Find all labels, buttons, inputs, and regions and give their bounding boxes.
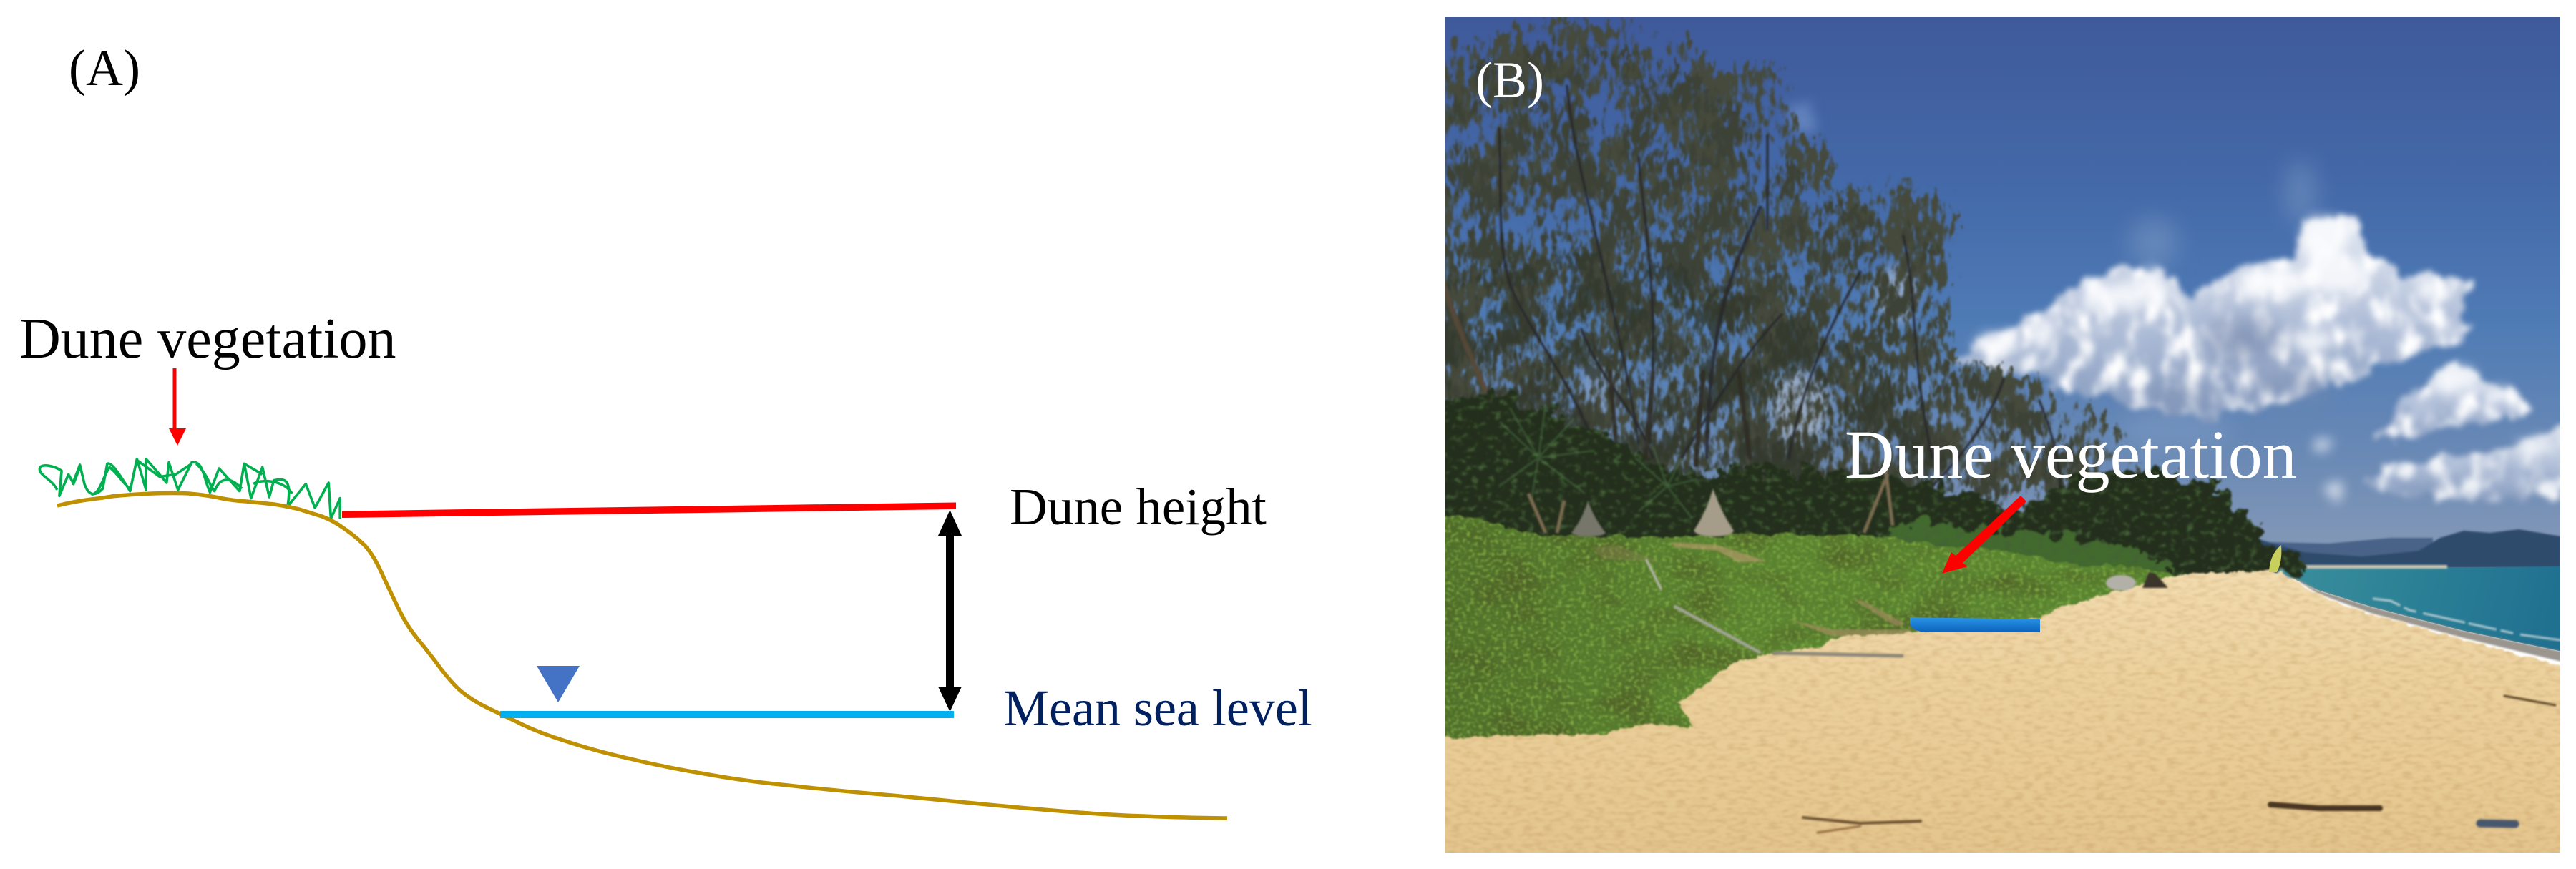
green dune vegetation slope	[1431, 515, 2190, 758]
main cumulus cloud	[1948, 213, 2471, 417]
arrow: dune height	[938, 510, 962, 712]
icon: water level triangle	[537, 666, 580, 702]
bare sand patches on dune	[1592, 542, 1911, 637]
rocks	[2106, 572, 2168, 591]
second cloud	[2374, 363, 2531, 441]
driftwood and debris	[1646, 560, 2555, 833]
label: dune vegetation: Dune vegetation	[19, 308, 396, 370]
clouds	[1581, 102, 2569, 501]
sea	[2272, 565, 2576, 665]
mean sea level line	[500, 711, 954, 718]
bushes behind dune	[1431, 392, 2311, 583]
beach sand	[1424, 571, 2576, 869]
arrow: to dune vegetation on photo	[1942, 496, 2026, 574]
label: dune height: Dune height	[1010, 478, 1267, 536]
faint cloud behind tree tops	[1790, 102, 1816, 134]
pandanus fronds	[1499, 404, 1697, 519]
kayak	[1910, 617, 2040, 632]
panel A: dune profile diagram	[19, 39, 1312, 818]
third cloud	[2362, 428, 2569, 501]
sky	[1431, 0, 2576, 579]
label: mean sea level: Mean sea level	[1003, 679, 1312, 737]
cloud highlights	[1975, 218, 2447, 356]
label: panel B: (B)	[1475, 51, 1544, 109]
dune profile line	[57, 494, 1227, 818]
cone-shaped huts	[1571, 488, 1734, 536]
dune crest reference line	[342, 502, 956, 518]
mountains	[2254, 529, 2561, 568]
tree canopy	[1415, 19, 2147, 501]
arrow: to dune vegetation	[169, 368, 186, 446]
sail	[2269, 545, 2281, 572]
panel label A: (A)	[69, 39, 140, 97]
cloud shadow	[2140, 318, 2333, 406]
bare trunks at base of trees	[1528, 468, 1893, 533]
panel B: beach photograph	[1415, 0, 2576, 869]
icon: vegetation scribble	[39, 459, 340, 519]
wispy haze	[2118, 161, 2316, 451]
label: dune vegetation on photo: Dune vegetation	[1845, 416, 2297, 493]
tree branches	[1442, 86, 2061, 501]
